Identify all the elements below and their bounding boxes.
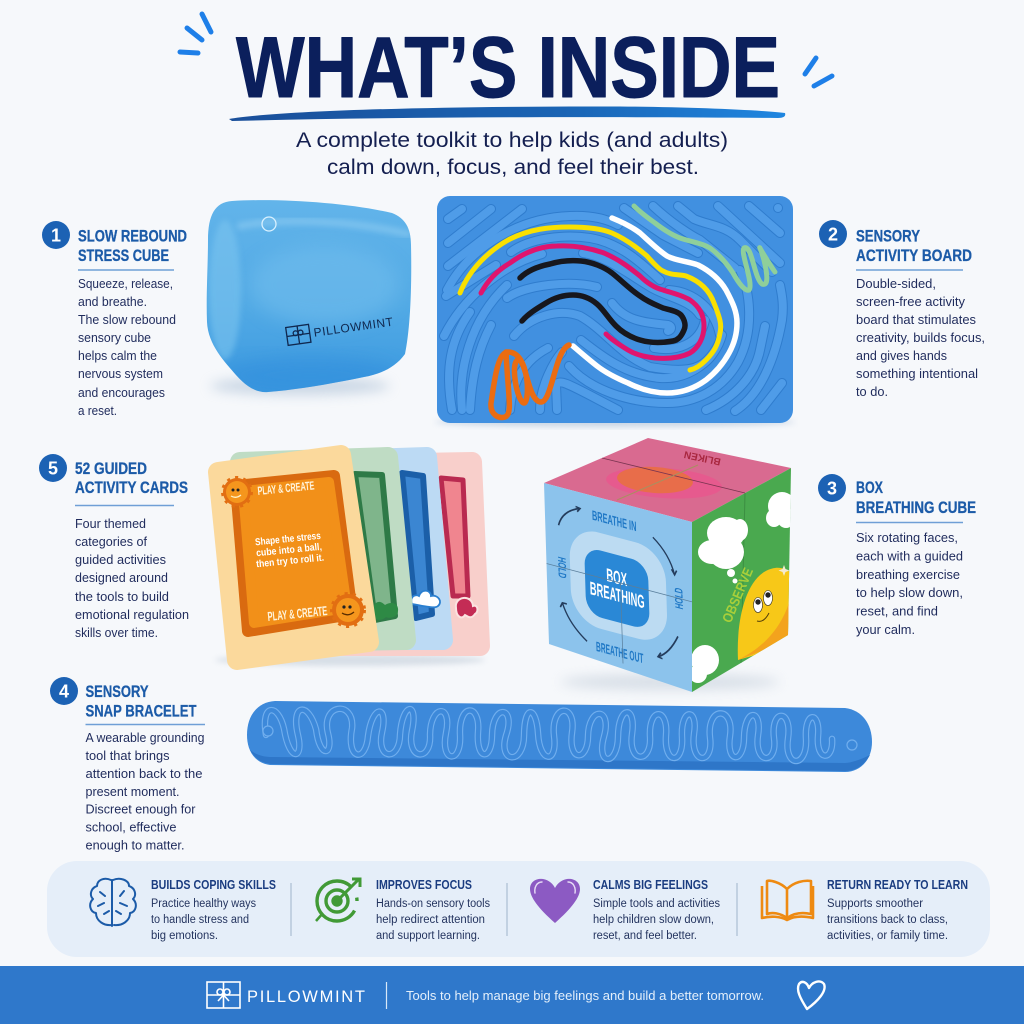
body text 2: something intentional — [856, 366, 978, 381]
body text 5 — [75, 516, 189, 640]
cube top face: BLIKEN — [683, 448, 722, 467]
body text 1: The slow rebound — [78, 312, 176, 327]
body text 2: board that stimulates — [856, 312, 976, 327]
body text 5: categories of — [75, 534, 147, 549]
body: Supports smoother — [827, 898, 923, 910]
heading 1 — [78, 226, 187, 270]
number badge 5 — [39, 454, 67, 482]
icon: brain — [90, 879, 136, 926]
heading 2: ACTIVITY BOARD — [856, 246, 972, 265]
heading 4 — [86, 682, 205, 724]
number badge 2 — [819, 220, 847, 248]
cube front face: BREATHING — [590, 578, 645, 613]
pink card — [310, 462, 480, 646]
product: box breathing cube — [544, 438, 796, 692]
body text 2: Double-sided, — [856, 276, 936, 291]
body text 4: Discreet enough for — [86, 802, 196, 816]
body text 3: each with a guided — [856, 548, 963, 564]
green card — [240, 457, 406, 642]
heading 2 — [856, 226, 972, 270]
body text 3: your calm. — [856, 622, 915, 637]
cube front face: BREATHE OUT — [596, 639, 644, 666]
body text 4: A wearable grounding — [86, 730, 204, 745]
body: Hands-on sensory tools — [376, 898, 490, 910]
heading 3: BOX — [856, 478, 883, 497]
card prompt text: cube into a ball, — [256, 542, 323, 559]
body: and support learning. — [376, 930, 480, 942]
body: Simple tools and activities — [593, 898, 720, 910]
heading 2: SENSORY — [856, 226, 921, 246]
body text 4: school, effective — [86, 820, 176, 834]
body text 2: creativity, builds focus, — [856, 330, 985, 345]
number badge 4: 4 — [59, 682, 69, 702]
title: WHAT’S INSIDE — [236, 20, 780, 116]
body text 4: present moment. — [86, 784, 180, 799]
card heading bottom: PLAY & CREATE — [267, 603, 328, 624]
brand name: PILLOWMINT — [247, 988, 365, 1006]
icon: target — [316, 879, 360, 921]
card prompt text: then try to roll it. — [256, 553, 325, 570]
orange card — [218, 455, 369, 660]
panel 3: box breathing cube text — [818, 474, 976, 637]
body text 2: to do. — [856, 384, 888, 399]
body — [593, 898, 720, 942]
body text 1: sensory cube — [78, 330, 151, 345]
panel 1: slow rebound stress cube text — [42, 221, 187, 418]
body: transitions back to class, — [827, 914, 948, 926]
heading 3: BREATHING CUBE — [856, 498, 976, 517]
body text 1: and breathe. — [78, 294, 147, 309]
heading 5 — [75, 459, 188, 506]
cube front face — [544, 483, 697, 692]
number badge 3 — [818, 474, 846, 502]
body — [827, 898, 948, 942]
character — [738, 568, 792, 660]
heading: RETURN READY TO LEARN — [827, 878, 968, 892]
panel 5: guided activity cards text — [39, 454, 189, 640]
heading 3 — [856, 478, 976, 522]
body text 4: enough to matter. — [86, 838, 184, 852]
body text 3: Six rotating faces, — [856, 530, 958, 545]
body: help children slow down, — [593, 914, 714, 926]
body text 5: the tools to build — [75, 589, 169, 604]
cube front face: HOLD — [673, 586, 686, 611]
icon: heart — [530, 879, 580, 923]
body text 3: reset, and find — [856, 604, 938, 618]
cube front face: BOX — [606, 565, 627, 590]
cube right face: OBSERVE — [719, 565, 756, 625]
heading 4: SENSORY — [86, 682, 149, 701]
body text 1: a reset. — [78, 403, 117, 418]
icon: right sparkle marks — [805, 58, 832, 86]
icon: sun bottom — [332, 594, 364, 626]
body text 5: guided activities — [75, 552, 166, 567]
body text 1: Squeeze, release, — [78, 276, 173, 291]
heading 1: STRESS CUBE — [78, 246, 169, 265]
panel 4: sensory snap bracelet text — [50, 677, 205, 852]
body text 3 — [856, 530, 963, 637]
heading: IMPROVES FOCUS — [376, 878, 472, 892]
body text 1: helps calm the — [78, 348, 157, 363]
benefit: return ready to learn — [762, 878, 968, 942]
panel 2: sensory activity board text — [819, 220, 985, 399]
heading 4: SNAP BRACELET — [86, 702, 197, 720]
icon: sun top — [223, 478, 251, 506]
cube top face — [544, 438, 791, 522]
subtitle — [296, 128, 728, 179]
body text 1: and encourages — [78, 385, 165, 400]
number badge 4 — [50, 677, 78, 705]
body text 5: skills over time. — [75, 625, 158, 640]
heading 5: 52 GUIDED — [75, 459, 147, 478]
body text 5: emotional regulation — [75, 607, 189, 622]
subtitle: A complete toolkit to help kids (and adults) — [296, 128, 728, 152]
body — [376, 898, 490, 942]
product: fan of activity cards — [215, 455, 485, 666]
body: big emotions. — [151, 930, 218, 942]
body: help redirect attention — [376, 914, 485, 926]
number badge 5: 5 — [48, 458, 58, 478]
tagline: Tools to help manage big feelings and build a better tomorrow. — [406, 988, 764, 1003]
benefits strip — [47, 861, 990, 957]
body text 1 — [78, 276, 176, 418]
product: blue stress cube — [207, 200, 411, 395]
body text 2: screen-free activity — [856, 294, 965, 309]
card heading top: PLAY & CREATE — [257, 478, 315, 498]
header: title and subtitle — [180, 14, 832, 179]
footer band — [0, 966, 1024, 1024]
icon: left sparkle marks — [180, 14, 211, 53]
heading: BUILDS COPING SKILLS — [151, 878, 276, 892]
body: to handle stress and — [151, 914, 249, 926]
product: sensory activity board — [435, 196, 795, 427]
benefit: builds coping skills — [90, 878, 276, 942]
body: Practice healthy ways — [151, 898, 256, 910]
number badge 1 — [42, 221, 70, 249]
clouds — [689, 492, 796, 683]
body text 3: to help slow down, — [856, 585, 963, 600]
number badge 1: 1 — [51, 226, 61, 246]
body text 4: attention back to the — [86, 766, 202, 781]
icon: open book — [762, 881, 813, 920]
blue card — [270, 457, 443, 640]
heading 1: SLOW REBOUND — [78, 226, 187, 246]
title brush underline — [229, 106, 785, 121]
benefit: improves focus — [316, 878, 490, 942]
subtitle: calm down, focus, and feel their best. — [327, 155, 699, 179]
product: snap bracelet — [247, 701, 872, 772]
body text 5: designed around — [75, 570, 168, 585]
heading 5: ACTIVITY CARDS — [75, 478, 188, 497]
icon: gift box logo — [207, 982, 240, 1008]
heading: CALMS BIG FEELINGS — [593, 878, 708, 892]
cube front face: HOLD — [555, 555, 568, 580]
card prompt text: Shape the stress — [255, 531, 322, 548]
body text 5: Four themed — [75, 516, 146, 531]
body: activities, or family time. — [827, 930, 948, 942]
cube front face: BREATHE IN — [592, 507, 637, 534]
logo on stress cube — [286, 313, 395, 345]
body text 4 — [86, 730, 204, 852]
icon: heart outline — [798, 981, 825, 1009]
body text 2: and gives hands — [856, 348, 947, 363]
body — [151, 898, 256, 942]
benefit: calms big feelings — [530, 878, 720, 942]
logo on stress cube: PILLOWMINT — [313, 315, 395, 340]
strings on board — [460, 206, 775, 417]
cube right face — [689, 468, 796, 692]
body: reset, and feel better. — [593, 930, 697, 942]
card prompt text — [254, 531, 325, 570]
body text 3: breathing exercise — [856, 567, 960, 582]
number badge 2: 2 — [828, 224, 838, 244]
body text 4: tool that brings — [86, 748, 170, 763]
body text 2 — [856, 276, 985, 399]
number badge 3: 3 — [827, 478, 837, 498]
body text 1: nervous system — [78, 366, 163, 381]
